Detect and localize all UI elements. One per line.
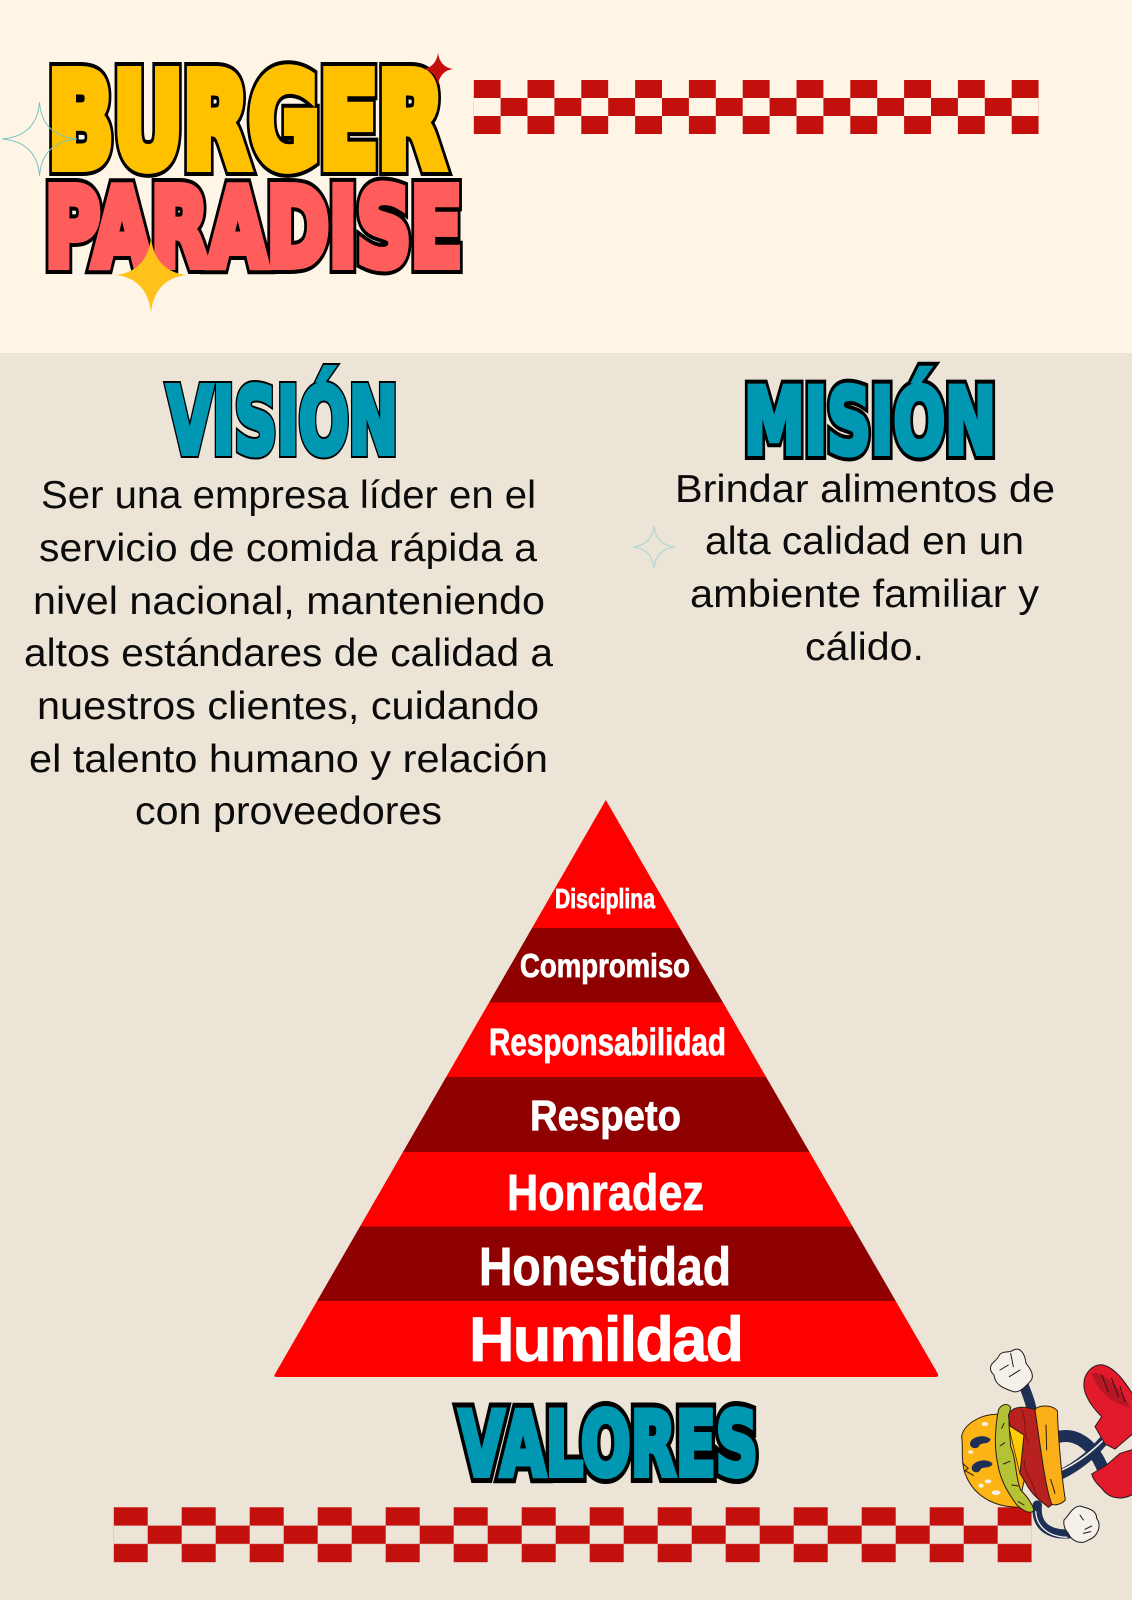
text block: vision statement: Ser una empresa líder en el: [41, 474, 536, 517]
text block: mission statement: [675, 468, 1055, 669]
heading: VALORES: VALORES: [459, 1393, 758, 1496]
title line: PARADISE: PARADISE: [45, 167, 462, 291]
panel: vision: [24, 366, 554, 833]
pyramid labels: Respeto: [530, 1092, 681, 1140]
back bun: [962, 1414, 1030, 1507]
text block: vision statement: con proveedores: [135, 790, 442, 833]
icon: red sparkle: [423, 53, 453, 85]
lettuce: [995, 1404, 1034, 1512]
pyramid labels: Honradez: [507, 1164, 704, 1221]
cheese: [1008, 1425, 1024, 1474]
heading: MISIÓN: MISIÓN: [744, 368, 996, 475]
top bun: [1035, 1406, 1065, 1505]
pyramid bands: [260, 795, 960, 1381]
icon: burger mascot: [962, 1349, 1132, 1542]
heading: VALORES: VALORES: [459, 1393, 758, 1496]
heading: VALORES: [459, 1393, 758, 1496]
text block: mission statement: alta calidad en un: [705, 520, 1024, 563]
patty: [1008, 1407, 1052, 1507]
text block: vision statement: servicio de comida rápida a: [39, 527, 538, 570]
title line: BURGER: BURGER: [48, 47, 444, 197]
text block: vision statement: el talento humano y relación: [29, 738, 548, 781]
title line: BURGER: BURGER: [48, 47, 444, 197]
text block: mission statement: ambiente familiar y: [690, 573, 1040, 616]
text block: mission statement: Brindar alimentos de: [675, 468, 1055, 511]
checkered band: top: [474, 80, 1039, 134]
pyramid labels: Disciplina: [555, 883, 655, 914]
heading: VISIÓN: VISIÓN: [167, 366, 398, 475]
title: Burger Paradise: [45, 47, 462, 291]
hands: [991, 1349, 1032, 1392]
heading: MISIÓN: [744, 368, 996, 475]
panel: mission: [675, 368, 1055, 669]
icon: teal outline sparkle: [2, 102, 77, 176]
pyramid labels: Responsabilidad: [489, 1022, 726, 1064]
pyramid labels: Compromiso: [520, 947, 690, 984]
pyramid labels: Honestidad: [479, 1237, 731, 1297]
pyramid labels: [469, 883, 744, 1375]
heading: VISIÓN: VISIÓN: [167, 366, 398, 475]
pyramid labels: Humildad: [469, 1305, 744, 1375]
title line: BURGER: [48, 47, 444, 197]
text block: vision statement: altos estándares de calidad a: [24, 632, 554, 675]
text block: vision statement: nivel nacional, manteniendo: [33, 580, 545, 623]
icon: pale teal sparkle: [633, 526, 675, 568]
face: [970, 1436, 991, 1448]
arms: [1024, 1386, 1032, 1410]
icon: yellow sparkle: [116, 238, 186, 312]
heading: MISIÓN: MISIÓN: [744, 368, 996, 475]
text block: mission statement: cálido.: [805, 626, 924, 669]
shoes: [1084, 1365, 1132, 1449]
title line: PARADISE: PARADISE: [45, 167, 462, 291]
heading: VISIÓN: [167, 366, 398, 475]
legs: [1057, 1436, 1103, 1470]
checkered band: bottom: [114, 1507, 1032, 1562]
chart: values pyramid: [260, 795, 960, 1381]
text block: vision statement: nuestros clientes, cuidando: [37, 685, 539, 728]
text block: vision statement: [24, 474, 554, 833]
